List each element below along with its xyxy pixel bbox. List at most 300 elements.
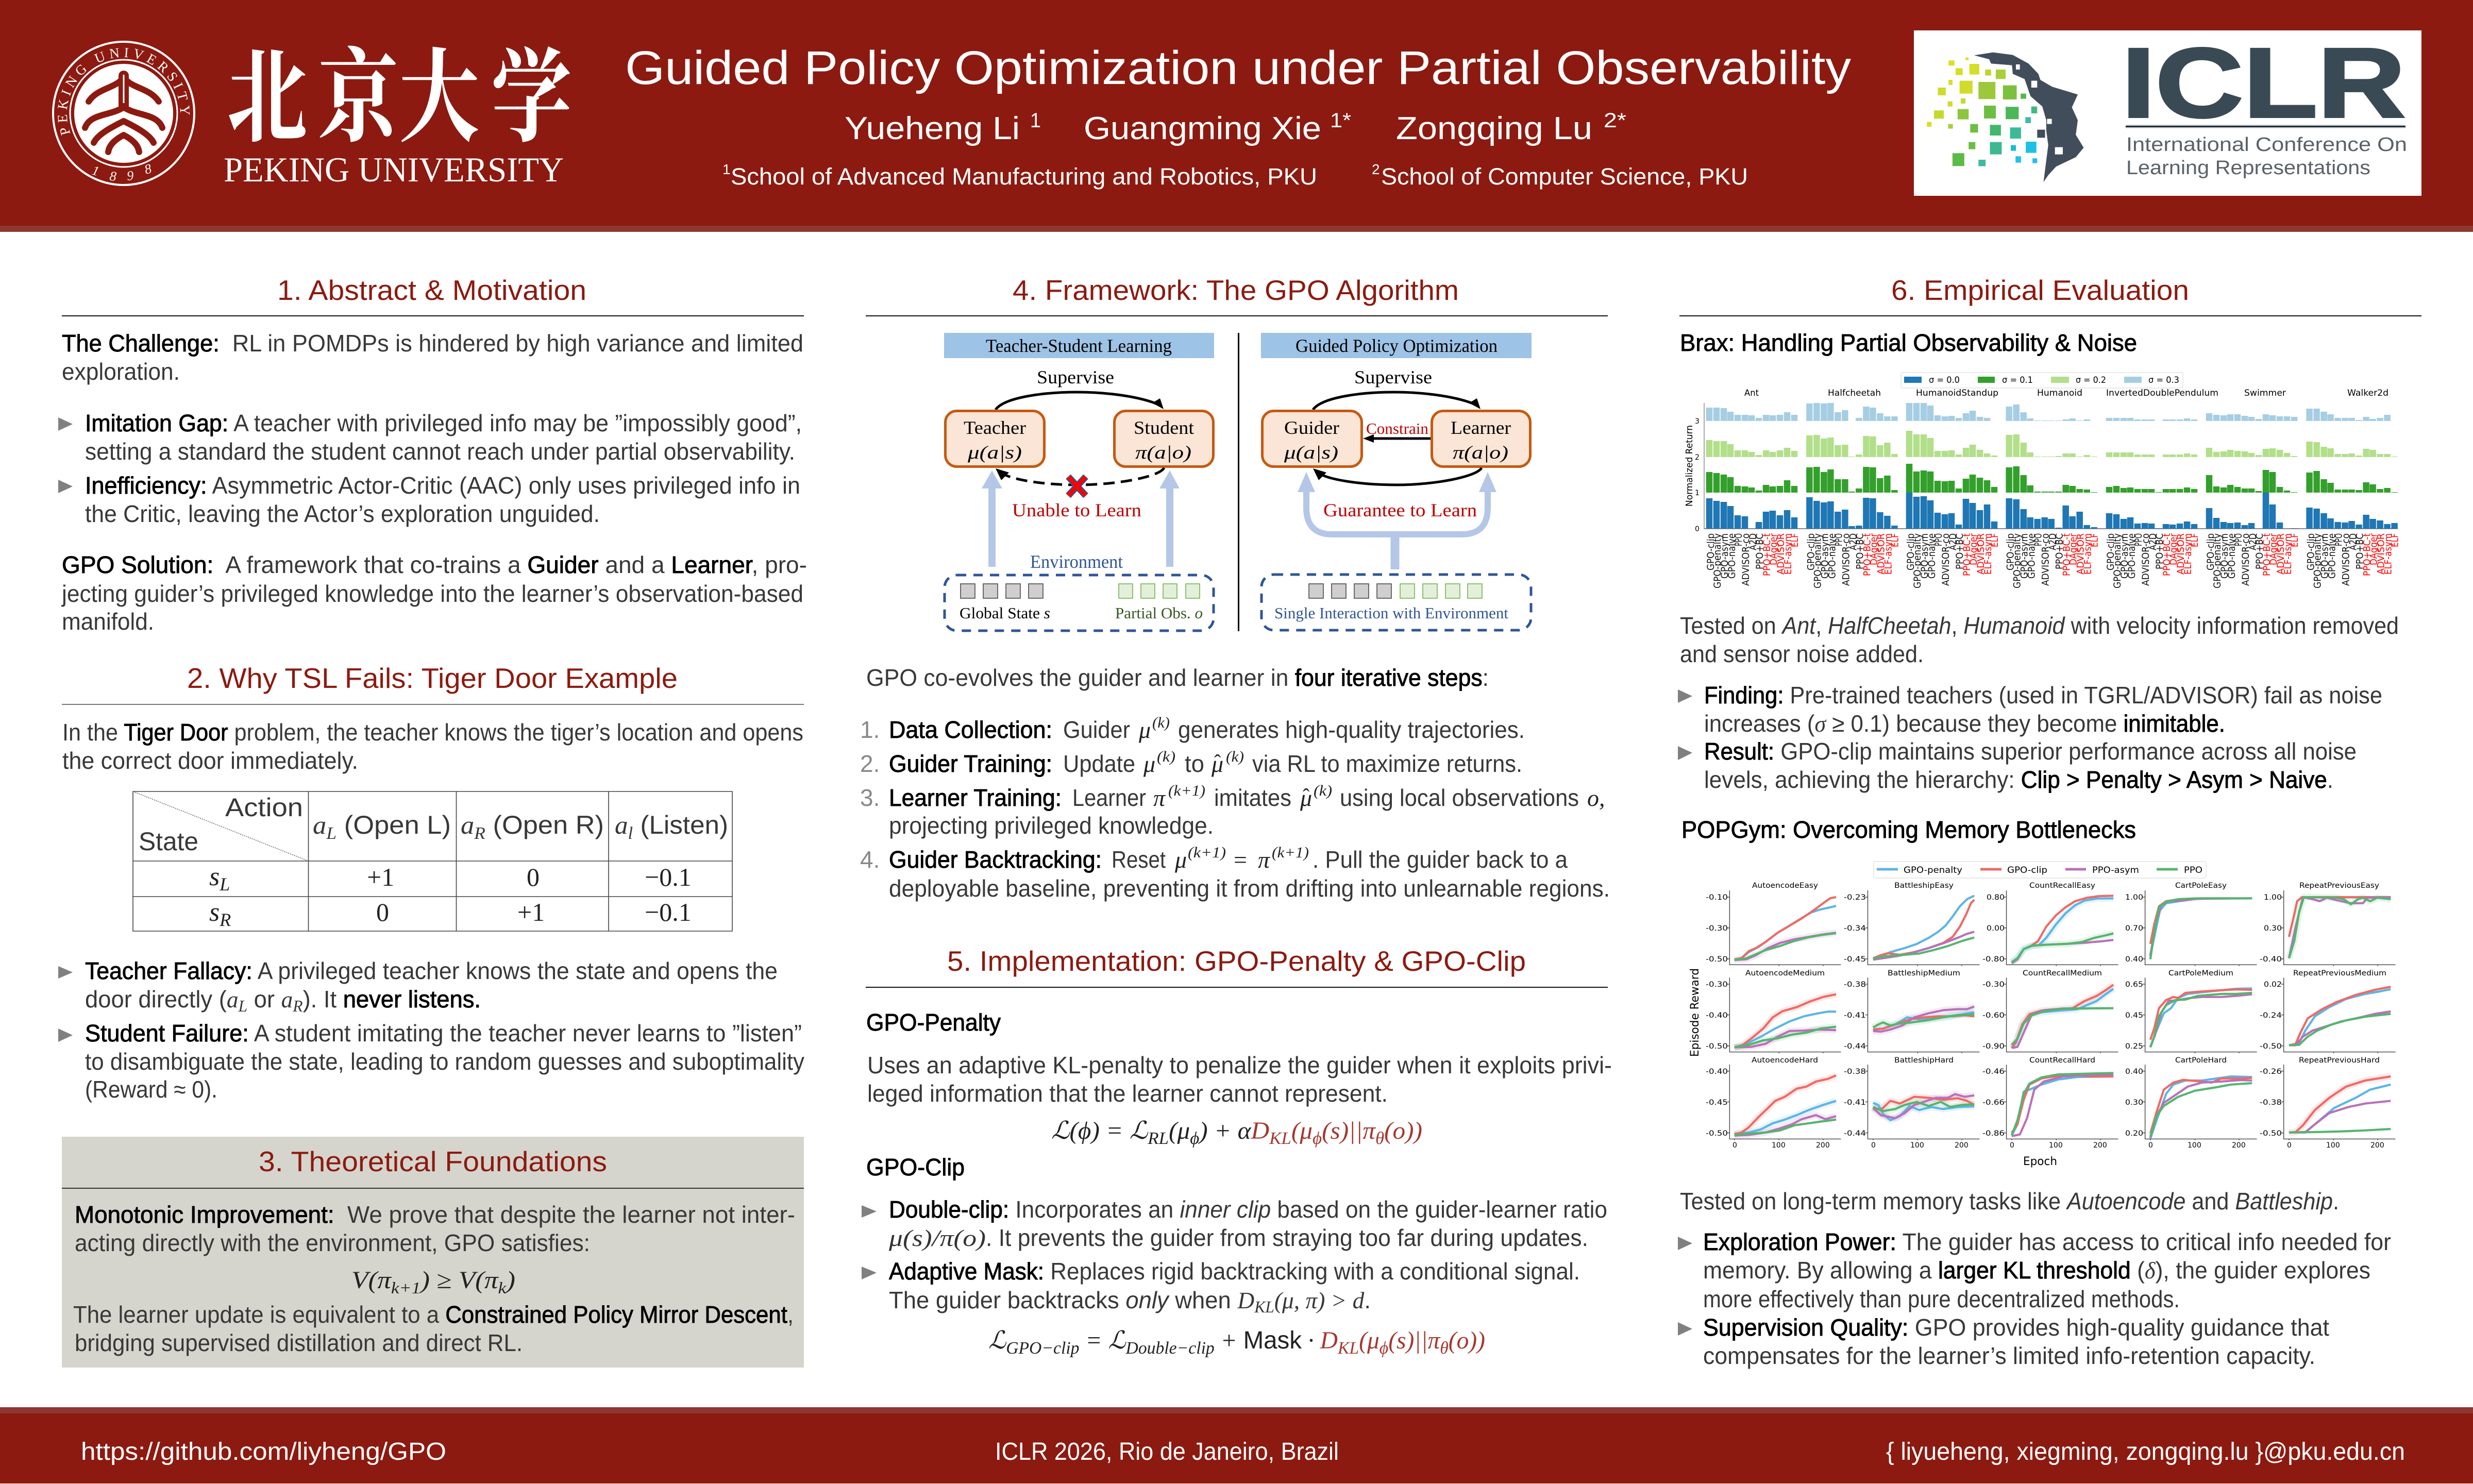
panel: column 1 — [58, 274, 807, 1368]
table: tiger door reward matrix: +1 — [367, 863, 394, 891]
legend: GPO-clip — [2007, 865, 2047, 875]
method labels: Ant: PPO+BC — [1754, 533, 1765, 569]
legend: σ = 0.1 — [2002, 375, 2033, 385]
authors: Yueheng Li — [845, 111, 1020, 146]
diagram panel: guided policy optimization: Constrain — [1366, 419, 1428, 437]
method labels: HumanoidStandup: GPO-clip — [1905, 533, 1916, 570]
method labels: Ant: ADVISOR-co — [1740, 533, 1752, 586]
step 3: π — [1153, 785, 1166, 811]
environment titles: Walker2d — [2347, 388, 2388, 398]
authors: 2* — [1604, 109, 1626, 132]
panel: CountRecallHard: 0 — [2010, 1141, 2014, 1150]
method labels: HumanoidStandup: ADVISOR — [1975, 533, 1987, 575]
bullet: adaptive mask: The guider backtracks only when D — [889, 1287, 1255, 1313]
panel: AutoencodeHard: 0 — [1732, 1141, 1737, 1150]
method labels: InvertedDoublePendulum: A2D — [2147, 533, 2159, 550]
formula: monotonic value: ) — [504, 1267, 515, 1294]
panel: CountRecallHard: -0.86 — [1982, 1129, 2005, 1138]
bullet: student failure: to disambiguate the state, leading to random guesses and suboptimality — [85, 1048, 804, 1075]
step 4: = — [1234, 847, 1247, 873]
bullet: adaptive mask: KL — [1254, 1297, 1274, 1316]
heading: 2. Why TSL Fails: 2. Why TSL Fails: Tiger Door Example — [187, 662, 678, 694]
subheading: GPO-Penalty: GPO-Penalty — [866, 1009, 1001, 1036]
method labels: InvertedDoublePendulum: ELF-asym — [2182, 533, 2194, 575]
environment titles: HumanoidStandup — [1916, 388, 1998, 398]
formula: GPO-Clip loss: Mask · D — [1243, 1327, 1338, 1354]
panel: CartPoleEasy — [2125, 882, 2257, 966]
method labels: Swimmer: PPO+BC — [2254, 533, 2265, 569]
header banner — [0, 0, 2473, 232]
method labels: Walker2d: ELF — [2390, 533, 2401, 547]
logo text: Peking University: PEKING UNIVERSITY — [224, 150, 564, 189]
method labels: Swimmer: GPO-naive — [2226, 533, 2238, 579]
step 3: (k) — [1314, 782, 1332, 799]
panel: BattleshipEasy: -0.45 — [1844, 955, 1866, 964]
step 1: 1. — [860, 716, 880, 743]
panel: BattleshipMedium — [1844, 969, 1979, 1053]
method labels: Humanoid: DAgger — [2068, 533, 2079, 565]
panel: CountRecallMedium: -0.60 — [1982, 1011, 2005, 1020]
line charts: POPGym episode reward — [1689, 862, 2396, 1168]
step 1: Data Collection: — [889, 716, 1052, 743]
formula: GPO-Penalty loss: ) + α — [1198, 1117, 1251, 1144]
environment titles — [1744, 388, 2388, 398]
method labels: Humanoid — [2005, 533, 2100, 588]
method labels: Ant: PPO+BC-t — [1761, 533, 1773, 576]
panel: AutoencodeEasy: -0.10 — [1706, 893, 1728, 902]
panel: CartPoleHard: 100 — [2188, 1141, 2201, 1150]
panel: BattleshipHard — [1844, 1056, 1979, 1150]
environment titles: Swimmer — [2244, 388, 2286, 398]
formula: GPO-Penalty loss: (o)) — [1384, 1117, 1422, 1144]
panel: RepeatPreviousMedium: -0.50 — [2260, 1042, 2282, 1051]
text: the challenge: exploration. — [62, 358, 180, 385]
method labels: Walker2d: PPO+BC-t — [2362, 533, 2373, 576]
panel: RepeatPreviousMedium: -0.24 — [2260, 1011, 2282, 1020]
bullet: result: Result: GPO-clip maintains superior performance across all noise — [1704, 738, 2357, 765]
method labels: InvertedDoublePendulum: GPO-asym — [2119, 533, 2130, 579]
text: the challenge: The Challenge: RL in POMDPs is hindered by high variance and limited — [62, 330, 803, 357]
footer: emails: { liyueheng, xiegming, zongqing.lu }@pku.edu.cn — [1886, 1438, 2405, 1465]
bullet: double-clip: Double-clip: Incorporates an inner clip based on the guider-learner ratio — [889, 1196, 1607, 1223]
method labels: Ant: GPO-naive — [1726, 533, 1738, 579]
bullet: teacher fallacy: L — [238, 997, 247, 1015]
table: tiger door reward matrix: +1 — [517, 898, 545, 926]
diagram panel: guided policy optimization — [1261, 333, 1532, 630]
axes: 1 — [1695, 489, 1700, 497]
step 2: (k) — [1157, 748, 1175, 765]
method labels: Humanoid: GPO-asym — [2019, 533, 2030, 579]
method labels: InvertedDoublePendulum: ADVISOR — [2175, 533, 2186, 575]
bullet: adaptive mask: (μ, π) > d — [1274, 1287, 1365, 1313]
panel: AutoencodeMedium — [1706, 969, 1841, 1053]
table: tiger door reward matrix: Action — [225, 793, 303, 822]
diagram panel: teacher-student learning: Global State s — [960, 604, 1050, 622]
formula: monotonic value: V(π — [351, 1267, 387, 1294]
table: tiger door reward matrix: −0.1 — [645, 863, 692, 891]
panel: RepeatPreviousHard: -0.50 — [2260, 1129, 2282, 1138]
method labels: Swimmer: DAgger — [2268, 533, 2279, 565]
panel: CartPoleMedium: CartPoleMedium — [2168, 969, 2233, 977]
icon: ICLR logo: Learning Representations — [2126, 157, 2370, 179]
method labels: Humanoid: ELF — [2089, 533, 2100, 547]
panel: AutoencodeHard: -0.45 — [1706, 1099, 1728, 1107]
bullet: teacher fallacy: ). It — [303, 986, 343, 1013]
panel: AutoencodeHard: -0.40 — [1706, 1068, 1728, 1076]
bullet: teacher fallacy — [58, 957, 778, 1015]
step 3: Learner Training: — [889, 784, 1062, 811]
method labels: Ant: PPO — [1733, 533, 1744, 546]
method labels: Walker2d: GPO-penalty — [2312, 533, 2324, 588]
panel: RepeatPreviousHard: 200 — [2370, 1141, 2384, 1150]
method labels: HumanoidStandup: ELF-asym — [1982, 533, 1994, 575]
axes: 3 — [1695, 417, 1700, 426]
panel: CartPoleHard: 0.30 — [2125, 1099, 2143, 1107]
axes: 0 — [1695, 525, 1700, 533]
step 4: . Pull the guider back to a — [1313, 846, 1568, 873]
legend: GPO-penalty — [1904, 865, 1962, 875]
formula: GPO-Penalty loss: ϕ — [1190, 1129, 1199, 1148]
panel: CartPoleEasy: 1.00 — [2125, 893, 2143, 902]
table: tiger door reward matrix: L — [219, 874, 230, 895]
bullet: adaptive mask — [862, 1258, 1580, 1316]
method labels: Halfcheetah: PPO — [1833, 533, 1844, 546]
panel: BattleshipEasy — [1844, 882, 1979, 966]
panel: BattleshipMedium: -0.41 — [1844, 1011, 1866, 1020]
method labels: Walker2d: GPO-naive — [2327, 533, 2338, 579]
method labels: HumanoidStandup: DAgger — [1968, 533, 1979, 565]
panel: CartPoleEasy: CartPoleEasy — [2175, 882, 2227, 890]
affiliations — [722, 161, 1748, 190]
method labels: Swimmer: PPO — [2233, 533, 2244, 546]
icon: Peking University seal — [52, 41, 195, 186]
subheading: GPO-Clip: GPO-Clip — [866, 1154, 965, 1181]
footer: venue: ICLR 2026, Rio de Janeiro, Brazil — [995, 1438, 1339, 1465]
method labels: Humanoid: ELF-asym — [2082, 533, 2094, 575]
step 1 — [860, 714, 1525, 743]
heading: 3. Theoretical Foundations: 3. Theoretical Foundations — [259, 1145, 607, 1177]
method labels: Ant: ELF-asym — [1782, 533, 1794, 575]
text: GPO solution: GPO Solution: A framework that co-trains a Guider and a Learner, pro- — [62, 551, 807, 578]
method labels: Humanoid: A2D — [2047, 533, 2059, 550]
step 4 — [860, 844, 1610, 902]
panel: AutoencodeEasy: -0.30 — [1706, 924, 1728, 933]
formula: GPO-Clip loss: Double−clip — [1125, 1339, 1215, 1358]
legend: σ = 0.0 — [1929, 375, 1960, 385]
panel: RepeatPreviousHard: 100 — [2326, 1141, 2340, 1150]
panel: column 2 — [860, 274, 1612, 1358]
method labels: Swimmer: PPO+BC-t — [2261, 533, 2273, 576]
method labels: Walker2d: GPO-asym — [2319, 533, 2331, 579]
panel: BattleshipHard: -0.44 — [1844, 1129, 1866, 1138]
step 2: μ — [1211, 751, 1223, 777]
text: GPO solution: jecting guider’s privileged knowledge into the learner’s observation-based — [61, 580, 803, 607]
legend: PPO — [2184, 865, 2202, 875]
panel: RepeatPreviousHard: 0 — [2287, 1141, 2292, 1150]
step 1: μ — [1138, 717, 1151, 743]
diagram panel: teacher-student learning: Teacher — [964, 417, 1026, 438]
bars: sigma 0.0 — [1709, 493, 2395, 529]
step 3: ˆ — [1303, 784, 1310, 807]
bullet: teacher fallacy: never listens. — [343, 986, 481, 1013]
panel: CountRecallHard — [1982, 1056, 2118, 1150]
text: monotonic improvement: Monotonic Improvement: We prove that despite the learner not inter- — [75, 1201, 795, 1228]
environment titles: InvertedDoublePendulum — [2106, 388, 2218, 398]
step 4: Guider Backtracking: — [889, 846, 1102, 873]
formula: monotonic value: ) ≥ V(π — [419, 1267, 499, 1294]
method labels: Halfcheetah: PPO+BC — [1854, 533, 1865, 569]
step 1: generates high-quality trajectories. — [1178, 716, 1525, 743]
table: tiger door reward matrix: (Open L) — [337, 811, 451, 839]
method labels: Walker2d: GPO-clip — [2306, 533, 2317, 570]
axes — [1684, 403, 2398, 533]
panel: BattleshipEasy: BattleshipEasy — [1894, 882, 1954, 890]
panel: CountRecallEasy: -0.80 — [1982, 955, 2005, 964]
bars: sigma 0.1 — [1709, 464, 2395, 493]
method labels: InvertedDoublePendulum: GPO-clip — [2105, 533, 2116, 570]
panel: AutoencodeMedium: AutoencodeMedium — [1745, 969, 1825, 977]
bullet: double-clip: μ(s)/π(o) — [888, 1225, 986, 1251]
panel: AutoencodeHard: 200 — [1816, 1141, 1830, 1150]
diagram panel: teacher-student learning: Student — [1134, 417, 1194, 438]
step 2: ˆ — [1214, 750, 1221, 773]
text: POPGym test description: Tested on long-term memory tasks like Autoencode and Battleship. — [1680, 1188, 2339, 1215]
table: tiger door reward matrix — [133, 791, 732, 931]
heading: 5. Implementation: 5. Implementation: GPO-Penalty & GPO-Clip — [947, 945, 1526, 977]
affiliations: 1 — [722, 161, 731, 177]
method labels: Ant: GPO-penalty — [1712, 533, 1723, 588]
panel: RepeatPreviousEasy — [2260, 882, 2396, 966]
step 4: Reset — [1112, 846, 1166, 873]
diagram panel: teacher-student learning: π(a|o) — [1135, 442, 1191, 463]
authors: Guangming Xie — [1084, 111, 1321, 146]
step 2: Update — [1063, 750, 1135, 777]
footer: repository link: https://github.com/liyheng/GPO — [81, 1438, 446, 1465]
method labels: Swimmer: A2D — [2247, 533, 2259, 550]
method labels: HumanoidStandup: GPO-asym — [1919, 533, 1930, 579]
formula: monotonic value: k — [498, 1278, 507, 1297]
diagram panel: teacher-student learning: μ(a|s) — [967, 442, 1022, 463]
method labels: Halfcheetah: GPO-penalty — [1812, 533, 1823, 588]
authors: 1* — [1330, 109, 1351, 132]
panel: CountRecallHard: CountRecallHard — [2029, 1056, 2095, 1065]
legend: σ = 0.2 — [2076, 375, 2106, 385]
axes: Normalized Return — [1684, 425, 1695, 507]
bars: sigma 0.3 — [1709, 403, 2387, 421]
formula: GPO-Penalty loss: θ — [1375, 1129, 1384, 1148]
formula: GPO-Clip loss: GPO−clip — [1006, 1339, 1080, 1358]
step 3: o, — [1587, 785, 1605, 811]
panel: BattleshipHard: 200 — [1955, 1141, 1969, 1150]
panel: CartPoleHard: 0 — [2148, 1141, 2153, 1150]
formula: GPO-Penalty loss: RL — [1147, 1129, 1169, 1148]
panel: RepeatPreviousMedium: RepeatPreviousMedium — [2293, 969, 2386, 977]
diagram panel: guided policy optimization: π(a|o) — [1453, 442, 1508, 463]
panel: CartPoleHard — [2125, 1056, 2257, 1150]
panel: RepeatPreviousEasy: -0.40 — [2260, 955, 2282, 964]
step 3: Learner — [1072, 784, 1146, 811]
bullet: double-clip: . It prevents the guider from straying too far during updates. — [986, 1224, 1588, 1251]
method labels: Halfcheetah: DAgger — [1868, 533, 1879, 565]
diagram panel: guided policy optimization: Guider — [1284, 417, 1339, 438]
formula: GPO-Penalty loss: (μ — [1291, 1117, 1313, 1144]
bullet: student failure: Student Failure: A student imitating the teacher never learns to ”listen” — [85, 1020, 802, 1047]
bar chart: Brax normalized return — [1684, 373, 2401, 588]
heading: 1. Abstract and Motivation: 1. Abstract & Motivation — [277, 274, 586, 306]
text: monotonic improvement — [75, 1201, 795, 1256]
panel: AutoencodeHard: -0.50 — [1706, 1129, 1728, 1138]
panel: CountRecallMedium: CountRecallMedium — [2023, 969, 2102, 977]
axis label: Epoch: Epoch — [2023, 1155, 2057, 1168]
diagram: teacher-student learning versus guided policy optimization — [944, 333, 1532, 631]
legend: PPO-asym — [2092, 865, 2139, 875]
step 2 — [860, 748, 1522, 777]
panel: CountRecallEasy: CountRecallEasy — [2029, 882, 2095, 890]
text: GPO-Penalty description: Uses an adaptive KL-penalty to penalize the guider when it exploits privi- — [867, 1052, 1612, 1078]
method labels: Swimmer: ADVISOR-co — [2240, 533, 2251, 586]
method labels: Halfcheetah: ELF — [1889, 533, 1900, 547]
method labels: Swimmer: GPO-clip — [2205, 533, 2216, 570]
method labels: Halfcheetah: GPO-naive — [1826, 533, 1838, 579]
method labels: HumanoidStandup: ADVISOR-co — [1940, 533, 1952, 586]
diagram panel: teacher-student learning: Unable to Learn — [1012, 500, 1141, 520]
panel: CountRecallEasy: 0.80 — [1987, 893, 2005, 902]
method labels: Ant: A2D — [1747, 533, 1759, 550]
text: Brax test description: and sensor noise added. — [1680, 640, 1924, 667]
bullet: exploration power: Exploration Power: The guider has access to critical info needed for — [1703, 1228, 2391, 1255]
table: tiger door reward matrix: a — [461, 811, 474, 839]
method labels: HumanoidStandup: ELF — [1989, 533, 2000, 547]
method labels: HumanoidStandup: A2D — [1947, 533, 1959, 550]
panel: RepeatPreviousEasy: RepeatPreviousEasy — [2299, 882, 2379, 890]
panel: RepeatPreviousEasy: 0.30 — [2264, 924, 2282, 933]
table: tiger door reward matrix: s — [209, 862, 220, 891]
panel: AutoencodeMedium: -0.30 — [1706, 981, 1728, 989]
panel: CartPoleHard: 0.20 — [2125, 1129, 2143, 1138]
method labels: Halfcheetah: ADVISOR — [1875, 533, 1887, 575]
panel: column 3 — [1678, 274, 2421, 1369]
method labels: Ant: ADVISOR — [1775, 533, 1787, 575]
panel: BattleshipEasy: -0.23 — [1844, 893, 1866, 902]
step 2: Guider Training: — [889, 750, 1052, 777]
formula: GPO-Clip loss: θ — [1440, 1339, 1449, 1358]
table: tiger door reward matrix: a — [615, 811, 628, 839]
panel: RepeatPreviousHard: -0.38 — [2260, 1099, 2282, 1107]
method labels: InvertedDoublePendulum: ELF — [2189, 533, 2200, 547]
method labels: InvertedDoublePendulum: PPO+BC — [2154, 533, 2165, 569]
diagram panel: guided policy optimization: Supervise — [1354, 367, 1432, 387]
formula: GPO-Penalty loss: (μ — [1169, 1117, 1190, 1144]
panel: RepeatPreviousMedium — [2260, 969, 2396, 1053]
method labels: InvertedDoublePendulum: GPO-naive — [2126, 533, 2138, 579]
panel: CountRecallEasy — [1982, 882, 2118, 966]
method labels: Ant: DAgger — [1768, 533, 1779, 565]
table: tiger door reward matrix: 0 — [527, 863, 540, 891]
text: four iterative steps intro: GPO co-evolves the guider and learner in four iterative steps: — [866, 664, 1489, 691]
panel: CountRecallHard: 200 — [2093, 1141, 2107, 1150]
bullet: adaptive mask: . — [1364, 1287, 1371, 1313]
table: tiger door reward matrix: L — [326, 824, 337, 843]
method labels: Humanoid: PPO+BC-t — [2061, 533, 2073, 576]
environment titles: Humanoid — [2037, 388, 2082, 398]
formula: GPO-Penalty loss: (s)||π — [1322, 1117, 1376, 1144]
step 2: (k) — [1226, 748, 1244, 765]
diagram panel: guided policy optimization: μ(a|s) — [1284, 442, 1338, 463]
method labels: HumanoidStandup: GPO-naive — [1926, 533, 1938, 579]
bullet: teacher fallacy: R — [292, 997, 303, 1015]
formula: monotonic value: k+1 — [391, 1278, 420, 1297]
panel: AutoencodeHard: 100 — [1772, 1141, 1786, 1150]
text: tiger door intro: the correct door immediately. — [62, 747, 358, 774]
panel: CountRecallHard: -0.46 — [1982, 1068, 2005, 1076]
panel: BattleshipHard: 0 — [1871, 1141, 1876, 1150]
method labels: Walker2d: ADVISOR-co — [2341, 533, 2352, 586]
table: tiger door reward matrix: s — [209, 898, 220, 927]
method labels: Halfcheetah: A2D — [1847, 533, 1859, 550]
panel: RepeatPreviousHard: -0.26 — [2260, 1068, 2282, 1076]
formula: GPO-Penalty loss: D — [1250, 1117, 1422, 1148]
panel: CountRecallHard: -0.66 — [1982, 1099, 2005, 1107]
method labels: Halfcheetah — [1805, 533, 1900, 588]
panel: BattleshipHard: -0.38 — [1844, 1068, 1866, 1076]
method labels: Swimmer: ELF — [2289, 533, 2300, 547]
panel: CartPoleHard: CartPoleHard — [2175, 1056, 2227, 1065]
legend — [1874, 862, 2206, 878]
diagram panel: teacher-student learning: Partial Obs. o — [1115, 604, 1203, 622]
panel: CountRecallMedium: -0.30 — [1982, 981, 2005, 989]
method labels: Walker2d: DAgger — [2368, 533, 2380, 565]
panel: BattleshipMedium: -0.38 — [1844, 981, 1866, 989]
method labels: Walker2d: A2D — [2348, 533, 2359, 550]
bullet: exploration power — [1678, 1228, 2391, 1312]
step 1: Guider — [1063, 716, 1130, 743]
panel: AutoencodeHard — [1706, 1056, 1841, 1150]
panel: CartPoleMedium: 0.65 — [2125, 981, 2143, 989]
bullet: student failure: (Reward ≈ 0). — [85, 1076, 217, 1103]
method labels: InvertedDoublePendulum: PPO+BC-t — [2161, 533, 2173, 576]
diagram panel: guided policy optimization: Guided Policy Optimization — [1296, 335, 1498, 356]
method labels: HumanoidStandup: GPO-penalty — [1912, 533, 1923, 588]
table: tiger door reward matrix: (Listen) — [633, 811, 728, 839]
bullet: inefficiency: Inefficiency: Asymmetric Actor-Critic (AAC) only uses privileged info in — [85, 472, 800, 499]
step 2: 2. — [860, 750, 880, 777]
environment titles: Ant — [1744, 388, 1759, 398]
method labels: Swimmer — [2205, 533, 2300, 588]
method labels: InvertedDoublePendulum: ADVISOR-co — [2140, 533, 2151, 586]
table: tiger door reward matrix: R — [219, 909, 231, 930]
method labels: Walker2d: ADVISOR — [2376, 533, 2387, 575]
formula: GPO-Clip loss: (s)||π — [1388, 1327, 1441, 1354]
bullet: inefficiency: the Critic, leaving the Actor’s exploration unguided. — [85, 500, 600, 527]
bullet: imitation gap — [58, 410, 802, 465]
authors: Zongqing Lu — [1396, 111, 1592, 146]
panel: CountRecallEasy: 0.00 — [1987, 924, 2005, 933]
method labels: HumanoidStandup: PPO+BC-t — [1961, 533, 1973, 576]
panel: AutoencodeMedium: -0.50 — [1706, 1042, 1728, 1051]
step 4: (k+1) — [1188, 844, 1226, 861]
panel: AutoencodeHard: AutoencodeHard — [1752, 1056, 1818, 1065]
method labels: HumanoidStandup: PPO+BC — [1954, 533, 1965, 569]
subheading: Brax: Brax: Handling Partial Observability & Noise — [1680, 329, 2137, 356]
bullet: supervision quality: Supervision Quality: GPO provides high-quality guidance that — [1703, 1314, 2329, 1341]
method labels: HumanoidStandup — [1905, 533, 2000, 588]
subheading: POPGym: POPGym: Overcoming Memory Bottlenecks — [1681, 816, 2136, 843]
formula: GPO-Clip loss: KL — [1337, 1339, 1359, 1358]
text: GPO-Penalty description — [867, 1052, 1612, 1107]
method labels: Walker2d — [2306, 533, 2401, 588]
method labels: Humanoid: PPO — [2033, 533, 2044, 546]
legend: σ = 0.3 — [2148, 375, 2179, 385]
